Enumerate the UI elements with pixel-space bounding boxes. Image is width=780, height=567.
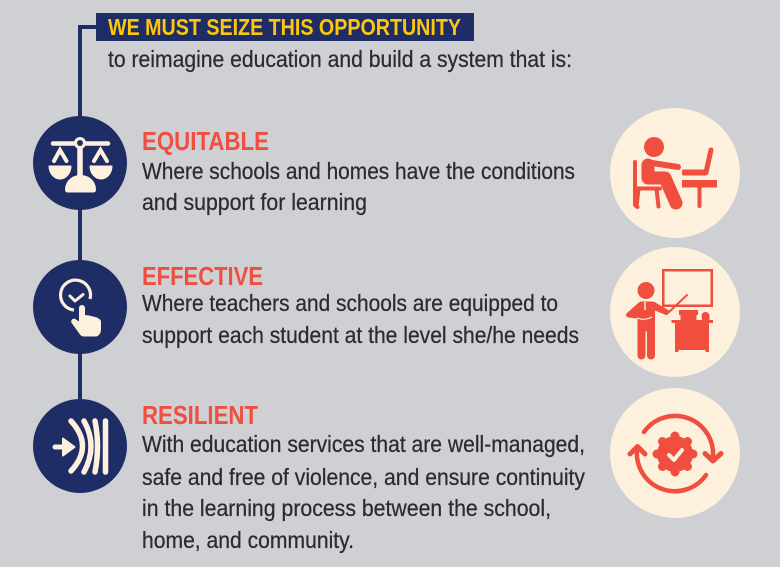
- text: equitable description: Where schools and homes have the conditions: [142, 158, 575, 184]
- text: equitable description: [142, 158, 575, 215]
- heading: equitable: EQUITABLE: [142, 126, 269, 156]
- icon: hand tap check: [33, 260, 127, 354]
- icon: gear with cycle arrows: [610, 388, 740, 518]
- text: resilient description: [142, 431, 585, 553]
- text: effective description: Where teachers and schools are equipped to: [142, 290, 558, 316]
- heading: resilient: RESILIENT: [142, 400, 258, 430]
- text: resilient description: With education services that are well-managed,: [142, 431, 585, 457]
- text: effective description: [142, 290, 579, 348]
- timeline connector: [80, 27, 96, 400]
- icon: scales: [33, 116, 127, 210]
- text: resilient description: home, and community.: [142, 527, 354, 553]
- text: resilient description: safe and free of violence, and ensure continuity: [142, 464, 585, 490]
- text: equitable description: and support for learning: [142, 189, 367, 215]
- text: resilient description: in the learning process between the school,: [142, 495, 551, 521]
- title banner: WE MUST SEIZE THIS OPPORTUNITY: [108, 14, 461, 40]
- icon: teacher at board: [610, 247, 740, 377]
- intro text: to reimagine education and build a system that is:: [108, 46, 572, 72]
- icon: arrow against barrier: [33, 399, 127, 493]
- heading: effective: EFFECTIVE: [142, 261, 263, 291]
- text: effective description: support each student at the level she/he needs: [142, 322, 579, 348]
- icon: student at laptop: [610, 108, 740, 238]
